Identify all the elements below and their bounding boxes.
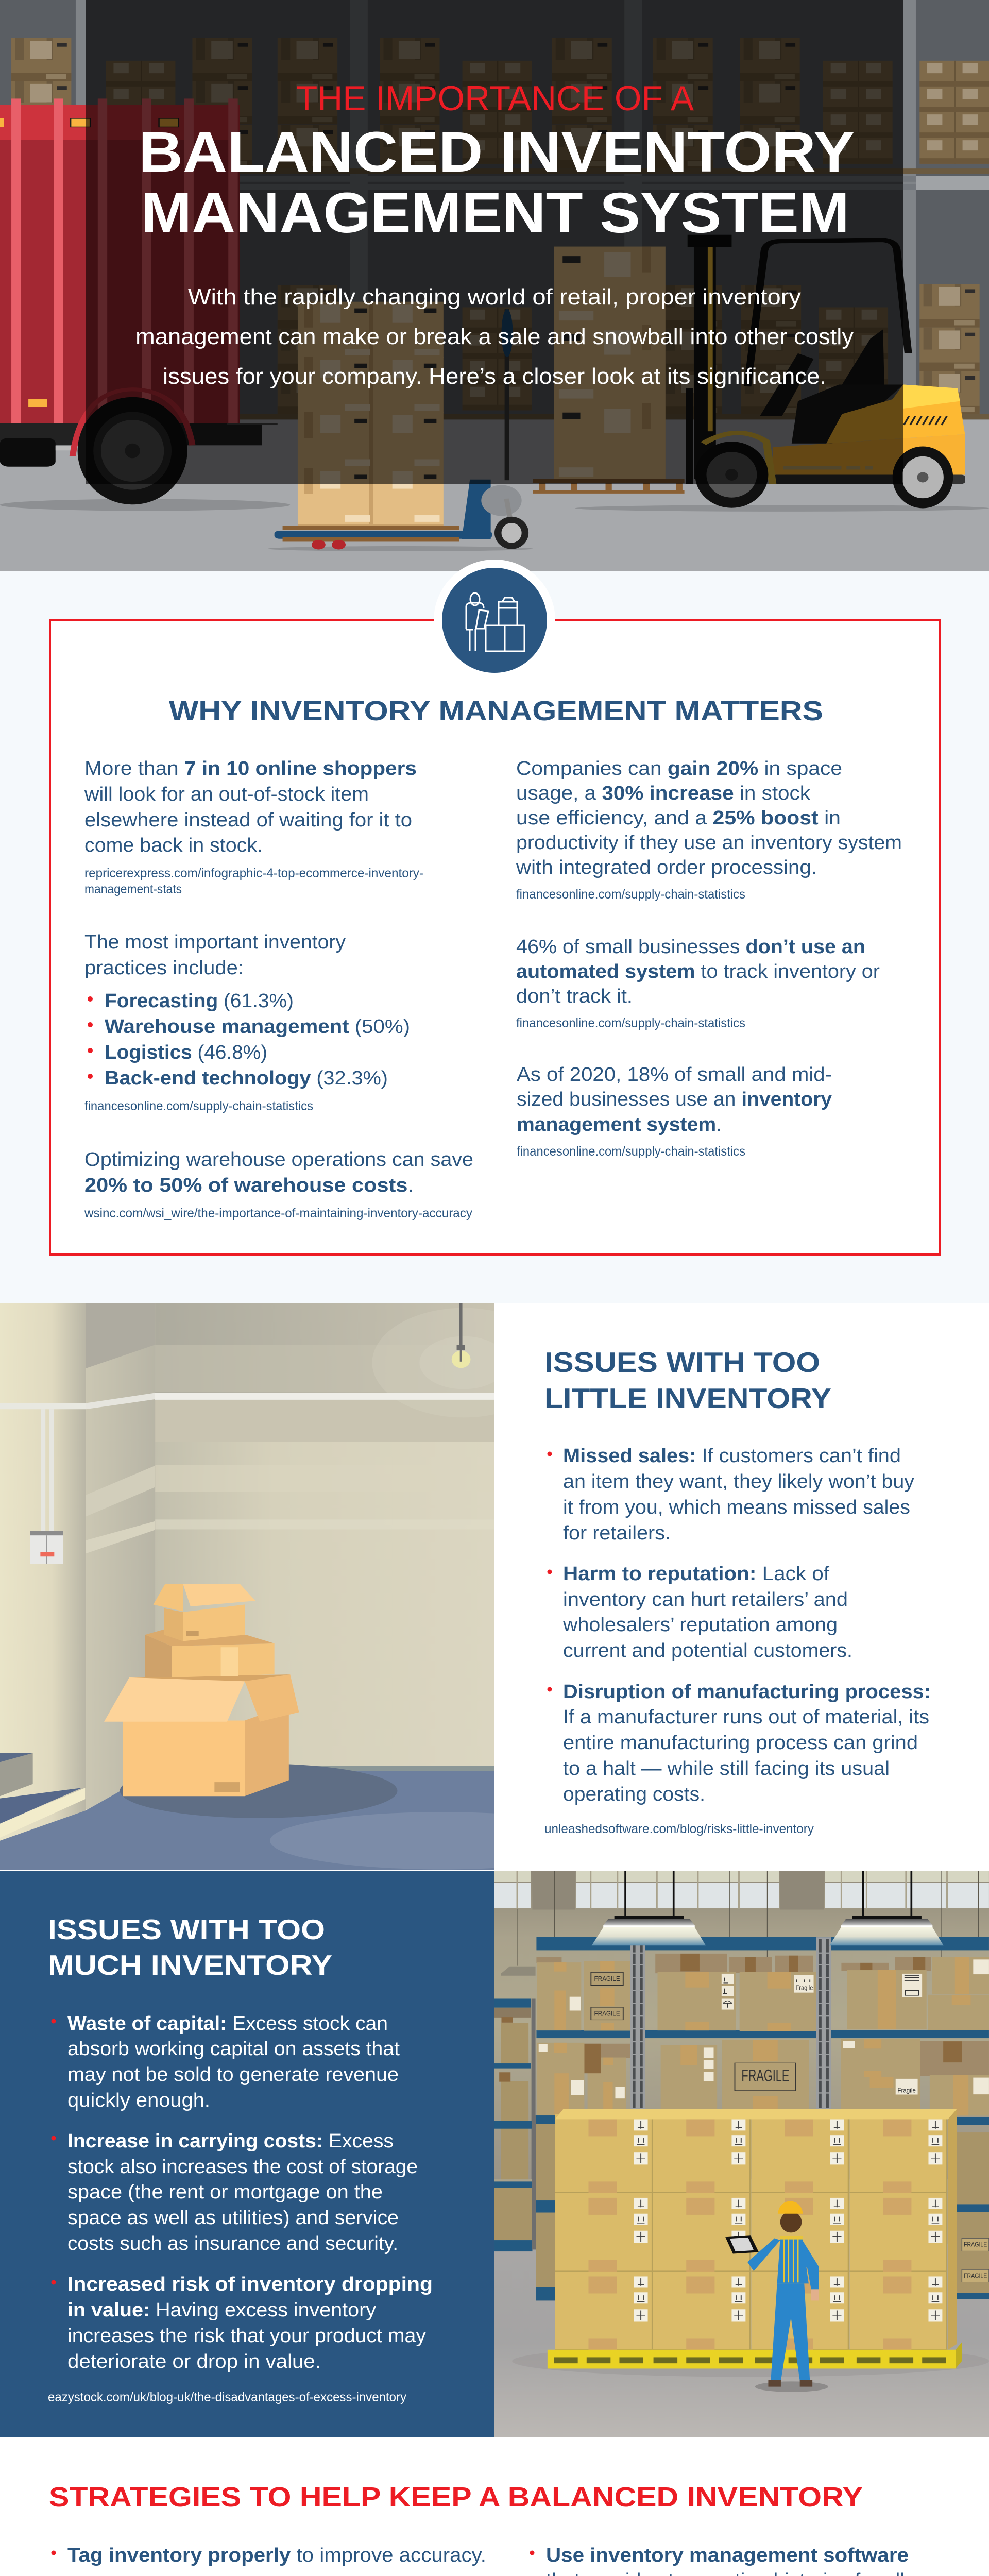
bullet: carrying costs: Increase in carrying costs: Excess bbox=[67, 2130, 394, 2152]
stat: online shoppers: More than 7 in 10 online shoppers bbox=[84, 758, 417, 779]
hero intro paragraph: management can make or break a sale and snowball into other costly bbox=[135, 324, 854, 349]
stat: inventory practices list: practices include: bbox=[84, 957, 244, 979]
bullet: harm to reputation bbox=[547, 1563, 852, 1662]
stat: space usage: productivity if they use an inventory system bbox=[516, 832, 902, 854]
illustration: full warehouse with worker: FRAGILE bbox=[594, 1975, 620, 1982]
illustration: full warehouse with worker: Fragile bbox=[796, 1984, 813, 1992]
illustration: full warehouse with worker: Fragile bbox=[897, 2087, 916, 2094]
stat: mid-sized businesses: management system . bbox=[517, 1114, 722, 1136]
strategies left column bbox=[52, 2545, 486, 2576]
stat: mid-sized businesses: sized businesses use an inventory bbox=[517, 1089, 832, 1110]
stat: online shoppers bbox=[84, 758, 423, 896]
stat: inventory practices list: Warehouse management (50%) bbox=[105, 1016, 410, 1038]
stat: space usage: Companies can gain 20% in space bbox=[516, 758, 842, 779]
bullet: disruption of manufacturing: operating costs. bbox=[563, 1784, 705, 1805]
bullet: risk of value drop: in value: Having excess inventory bbox=[67, 2299, 376, 2321]
stat: mid-sized businesses bbox=[517, 1064, 832, 1159]
stacked pallet of boxes bbox=[268, 302, 533, 551]
strategies left column: Tag inventory properly to improve accuracy. bbox=[67, 2545, 486, 2566]
bullet: risk of value drop: Increased risk of inventory dropping bbox=[67, 2274, 433, 2295]
heading: WHY INVENTORY MANAGEMENT MATTERS bbox=[169, 696, 823, 726]
stat: space usage: usage, a 30% increase in stock bbox=[516, 783, 811, 804]
bullet: missed sales bbox=[547, 1445, 914, 1544]
hero banner bbox=[0, 0, 989, 571]
bullet: harm to reputation: wholesalers’ reputation among bbox=[562, 1614, 838, 1636]
fragile stacked boxes on pallet bbox=[548, 2109, 962, 2368]
stat: warehouse costs: Optimizing warehouse operations can save bbox=[84, 1149, 473, 1171]
illustration: full warehouse with worker: FRAGILE bbox=[741, 2066, 789, 2085]
panel: why inventory management matters bbox=[0, 560, 989, 1303]
source: unleashedsoftware.com/blog/risks-little-inventory bbox=[544, 1822, 814, 1836]
bullet: carrying costs: stock also increases the cost of storage bbox=[67, 2156, 418, 2178]
heading bbox=[544, 1346, 831, 1414]
stat: inventory practices list: Logistics (46.8%) bbox=[105, 1042, 267, 1063]
stat: mid-sized businesses: As of 2020, 18% of small and mid- bbox=[517, 1064, 832, 1086]
stat: small businesses: automated system to track inventory or bbox=[516, 961, 880, 982]
bullet: harm to reputation: Harm to reputation: Lack of bbox=[563, 1563, 829, 1585]
stat: space usage: with integrated order processing. bbox=[516, 857, 817, 878]
bullet: disruption of manufacturing: to a halt — while still facing its usual bbox=[563, 1758, 890, 1780]
hero title: BALANCED INVENTORY bbox=[139, 121, 855, 184]
fragile label right bbox=[962, 2238, 989, 2282]
panel: issues with too much inventory bbox=[0, 1870, 989, 2441]
strategies right column bbox=[530, 2545, 909, 2576]
bullet: carrying costs bbox=[52, 2130, 418, 2255]
source: eazystock.com/uk/blog-uk/the-disadvantages-of-excess-inventory bbox=[48, 2390, 406, 2404]
stat: space usage: financesonline.com/supply-chain-statistics bbox=[516, 887, 745, 902]
bullet: risk of value drop: increases the risk that your product may bbox=[67, 2325, 426, 2347]
pallet with tall box stack bbox=[533, 247, 685, 494]
bullet: missed sales: Missed sales: If customers can’t find bbox=[563, 1445, 901, 1467]
bullet: disruption of manufacturing bbox=[547, 1681, 931, 1805]
stat: inventory practices list bbox=[84, 931, 410, 1113]
hero intro paragraph: With the rapidly changing world of retail, proper inventory bbox=[188, 284, 801, 310]
bullet: disruption of manufacturing: Disruption of manufacturing process: bbox=[563, 1681, 931, 1703]
stat: inventory practices list: The most important inventory bbox=[84, 931, 346, 953]
hero title: THE IMPORTANCE OF A bbox=[296, 79, 694, 118]
illustration: full warehouse with worker bbox=[494, 1871, 989, 2437]
hanging light bulb bbox=[452, 1303, 470, 1368]
strategies right column: Use inventory management software bbox=[546, 2545, 909, 2566]
hero warehouse illustration bbox=[0, 0, 989, 551]
bullet: disruption of manufacturing: entire manufacturing process can grind bbox=[563, 1732, 918, 1754]
hero title bbox=[139, 79, 855, 245]
stat: online shoppers: repricerexpress.com/infographic-4-top-ecommerce-inventory- bbox=[84, 866, 423, 880]
bullet: carrying costs: space (the rent or mortgage on the bbox=[67, 2181, 383, 2203]
forklift bbox=[575, 235, 989, 512]
stat: online shoppers: come back in stock. bbox=[84, 835, 263, 856]
electrical switch box bbox=[30, 1531, 63, 1564]
heading: ISSUES WITH TOO bbox=[48, 1913, 325, 1945]
bullet: waste of capital: quickly enough. bbox=[67, 2090, 210, 2111]
bullet: waste of capital bbox=[52, 2013, 400, 2111]
stat: online shoppers: will look for an out-of-stock item bbox=[84, 784, 369, 805]
bullet: waste of capital: may not be sold to generate revenue bbox=[67, 2064, 399, 2086]
stat: small businesses bbox=[516, 936, 880, 1030]
bullet: disruption of manufacturing: If a manufacturer runs out of material, its bbox=[563, 1706, 929, 1728]
heading: MUCH INVENTORY bbox=[48, 1949, 332, 1981]
hero title: MANAGEMENT SYSTEM bbox=[141, 181, 849, 245]
stat: online shoppers: elsewhere instead of waiting for it to bbox=[84, 809, 412, 831]
stat: warehouse costs bbox=[84, 1149, 473, 1221]
bullet: missed sales: it from you, which means missed sales bbox=[563, 1497, 910, 1518]
truck bbox=[0, 98, 290, 511]
cardboard boxes stack bbox=[104, 1584, 299, 1796]
stat: small businesses: 46% of small businesses don’t use an bbox=[516, 936, 865, 958]
illustration: full warehouse with worker: FRAGILE bbox=[594, 2009, 620, 2017]
stat: space usage: use efficiency, and a 25% boost in bbox=[516, 807, 841, 829]
bullet: waste of capital: Waste of capital: Excess stock can bbox=[67, 2013, 388, 2035]
bullet: carrying costs: costs such as insurance and security. bbox=[67, 2233, 398, 2255]
stat: small businesses: don’t track it. bbox=[516, 986, 633, 1007]
stat: online shoppers: management-stats bbox=[84, 882, 182, 896]
bullet: harm to reputation: inventory can hurt retailers’ and bbox=[563, 1589, 848, 1611]
icon: worker with boxes badge bbox=[434, 560, 555, 681]
hero intro paragraph: issues for your company. Here’s a closer look at its significance. bbox=[163, 364, 826, 389]
heading: LITTLE INVENTORY bbox=[544, 1382, 831, 1414]
stat: space usage bbox=[516, 758, 902, 902]
panel: issues with too little inventory bbox=[0, 1303, 989, 1871]
worker with tablet bbox=[725, 2201, 828, 2392]
bullet: risk of value drop: deteriorate or drop in value. bbox=[67, 2351, 321, 2372]
bullet: risk of value drop bbox=[52, 2274, 433, 2372]
bullet: harm to reputation: current and potential customers. bbox=[563, 1640, 852, 1662]
stat: inventory practices list: Back-end technology (32.3%) bbox=[105, 1067, 388, 1089]
stat: inventory practices list: Forecasting (61.3%) bbox=[105, 990, 294, 1012]
stat: small businesses: financesonline.com/supply-chain-statistics bbox=[516, 1016, 745, 1030]
heading bbox=[48, 1913, 332, 1981]
heading: ISSUES WITH TOO bbox=[544, 1346, 820, 1378]
stat: mid-sized businesses: financesonline.com/supply-chain-statistics bbox=[517, 1144, 745, 1159]
panel: strategies bbox=[0, 2482, 989, 2576]
bullet: missed sales: for retailers. bbox=[563, 1522, 671, 1544]
stat: inventory practices list: financesonline.com/supply-chain-statistics bbox=[84, 1099, 313, 1113]
heading: STRATEGIES TO HELP KEEP A BALANCED INVENTORY bbox=[49, 2482, 863, 2513]
hero intro paragraph bbox=[135, 284, 854, 389]
bullet: missed sales: an item they want, they likely won’t buy bbox=[563, 1471, 914, 1493]
stat: warehouse costs: 20% to 50% of warehouse costs . bbox=[84, 1175, 414, 1196]
bullet: carrying costs: space as well as utilities) and service bbox=[67, 2207, 399, 2229]
stat: warehouse costs: wsinc.com/wsi_wire/the-importance-of-maintaining-inventory-accuracy bbox=[84, 1206, 472, 1221]
illustration: empty storage room with boxes bbox=[0, 1303, 494, 1870]
bullet: waste of capital: absorb working capital on assets that bbox=[67, 2038, 400, 2060]
